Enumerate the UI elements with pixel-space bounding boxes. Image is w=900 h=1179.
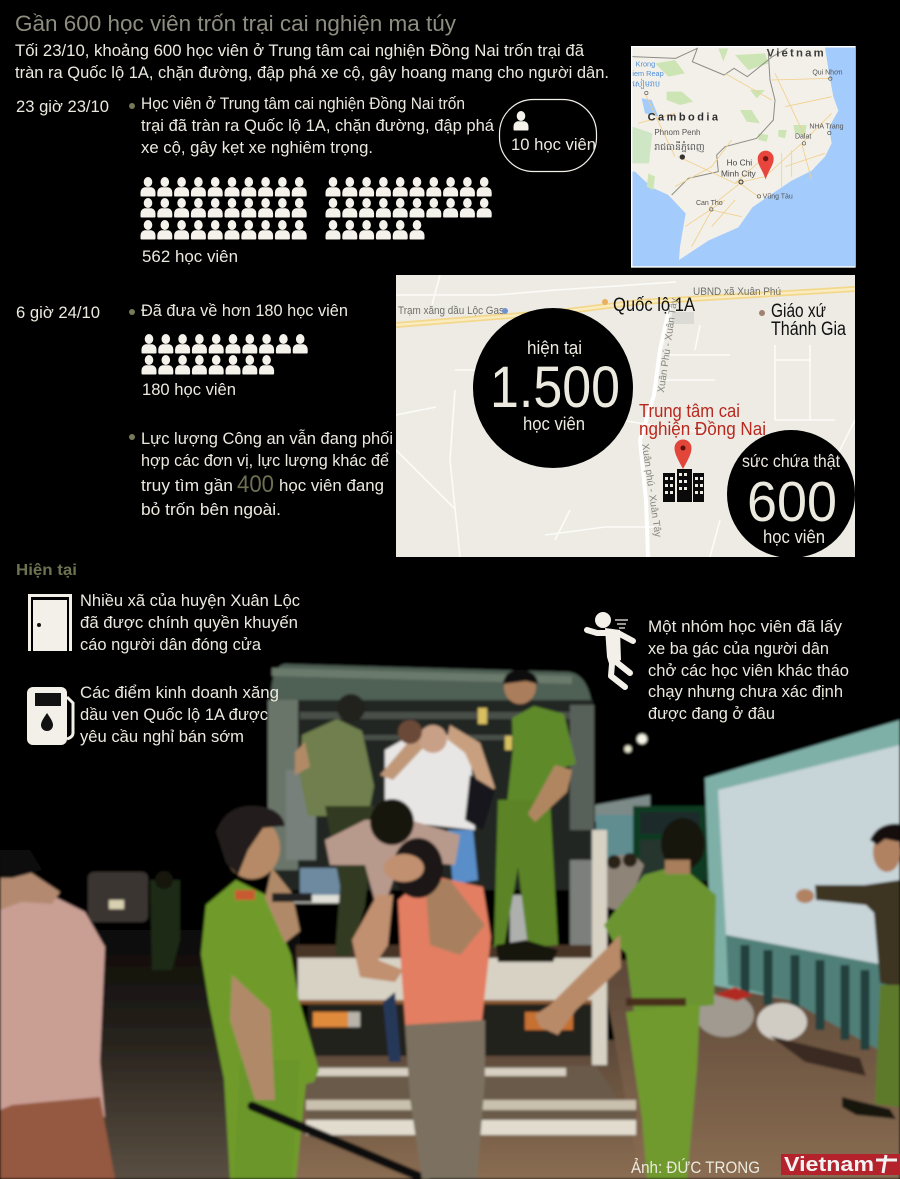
photo: police and recaptured students at the truck [0,662,900,1179]
text: escape by cargo tricycle: chạy nhưng chưa xác định [648,682,843,701]
map: southern Vietnam: Vũng Tàu [763,194,793,201]
truck canopy [268,662,594,702]
event text: search for 400 students [129,429,393,519]
man in checked shirt [0,897,105,1117]
map: southern Vietnam: NHA Trang [809,123,844,130]
map: southern Vietnam: Cambodia [648,112,719,124]
road: Xuân Phú - Xuân Tây [640,300,671,557]
text: door advisory [80,591,300,654]
map: southern Vietnam: Vietnam [767,48,825,60]
text: fuel stations closing: Các điểm kinh doanh xăng [80,683,279,702]
map label: center name: nghiện Đồng Nai [639,419,766,439]
map: southern Vietnam [631,46,856,268]
event text: first event [129,94,495,157]
police officer on truck, standing [507,706,576,804]
police officer with baton [201,880,319,1179]
legend: one icon equals 10 students [500,100,596,172]
icon: running person [587,612,633,687]
text: escape by cargo tricycle: được đang ở đâu [648,704,775,723]
text: escape by cargo tricycle: chở các học viên khác tháo [648,661,849,680]
map: southern Vietnam: រាជធានីភ្នំពេញ [654,141,705,153]
photo credit: Ảnh: ĐỨC TRONG [631,1158,760,1177]
logo: Vietnam+: Vietnam [784,1154,874,1176]
logo: Vietnam+ [781,1154,900,1176]
text: escape by cargo tricycle: xe ba gác của người dân [648,639,829,658]
police officer, back view [604,865,716,1013]
map: center location: UBND xã Xuân Phú [693,286,781,298]
map: center location: Xuân phú - Xuân Tây [639,443,663,538]
intro text: tràn ra Quốc lộ 1A, chặn đường, đập phá xe cộ, gây hoang mang cho người dân. [15,63,609,82]
circle: current 1,500 students: hiện tại [527,338,582,358]
truck bed [296,945,596,959]
people behind [606,855,644,913]
pictogram: 180 students: 180 học viên [142,380,236,399]
map: southern Vietnam: Can Tho [696,200,723,207]
truck cargo box [268,700,593,890]
event text: search for 400 students: Lực lượng Công an vẫn đang phối [141,429,393,448]
map label: Giáo xứ Thánh Gia: Thánh Gia [771,319,846,340]
sacks [696,993,754,1037]
map: center location [396,275,855,557]
text: door advisory: Nhiều xã của huyện Xuân Lộc [80,591,300,610]
map label: Quốc lộ 1A: Quốc lộ 1A [613,295,695,316]
icon: location pin [674,440,692,469]
map label: center name [639,401,766,439]
text: fuel stations closing: yêu cầu nghỉ bán sớm [80,727,244,746]
circle: current 1,500 students [473,308,633,468]
map: southern Vietnam: Krong [636,60,655,69]
wall [702,718,900,1000]
text: door advisory: cáo người dân đóng cửa [80,635,262,654]
intro text [15,41,609,82]
map: southern Vietnam: Dalat [795,134,811,141]
event text: search for 400 students: hợp các đơn vị, lực lượng khác để [141,451,389,470]
map: southern Vietnam: Qui Nhơn [812,69,843,76]
legend: one icon equals 10 students: 10 học viên [511,135,596,154]
event text: first event: Học viên ở Trung tâm cai nghiện Đồng Nai trốn [141,94,465,113]
map: center location: Trạm xăng dầu Lộc Gas [398,305,504,317]
cargo goods [300,868,345,898]
road: Quốc lộ 1A [396,289,855,325]
text: fuel stations closing [80,683,279,746]
event text: search for 400 students: học viên đang [279,476,384,495]
text: escape by cargo tricycle: Một nhóm học viên đã lấy [648,617,842,636]
man with dark hair [323,818,462,900]
map: southern Vietnam: Minh City [721,169,757,179]
section heading: Hiện tại: Hiện tại [16,562,77,579]
police officer on truck, back view [300,719,374,816]
text: fuel stations closing: dầu ven Quốc lộ 1A được [80,705,268,724]
event text: search for 400 students: truy tìm gần [141,476,233,495]
event text: search for 400 students: bỏ trốn bên ngoài. [141,500,281,519]
intro text: Tối 23/10, khoảng 600 học viên ở Trung tâm cai nghiện Đồng Nai trốn trại đã [15,41,585,60]
event text: search for 400 students: 400 [237,471,274,498]
time label: 23 giờ 23/10: 23 giờ 23/10 [16,97,109,116]
map label: center name: Trung tâm cai [639,401,740,421]
map: southern Vietnam: សៀមរាប [632,79,660,90]
circle: real capacity 600 students: học viên [763,526,825,547]
background car [88,872,148,922]
text: escape by cargo tricycle [648,617,849,723]
map label: Giáo xứ Thánh Gia: Giáo xứ [771,301,826,322]
map: southern Vietnam: Phnom Penh [654,128,701,137]
tattooed man in orange shirt [398,875,491,1035]
time label: 6 giờ 24/10: 6 giờ 24/10 [16,303,100,322]
event text: first event: xe cộ, gây kẹt xe nghiêm trọng. [141,138,373,157]
pictogram: 562 students: 562 học viên [142,247,238,266]
map: southern Vietnam: iem Reap [632,69,664,78]
pictogram: 562 students [140,177,492,266]
circle: real capacity 600 students: sức chứa thật [742,451,840,471]
title: Gần 600 học viên trốn trại cai nghiện ma túy [15,11,457,36]
text: door advisory: đã được chính quyền khuyến [80,613,298,632]
event text: first event: trại đã tràn ra Quốc lộ 1A, chặn đường, đập phá [141,116,495,135]
prisoners on truck [385,730,475,830]
baton [252,1106,425,1179]
green gate and building [595,795,650,822]
circle: current 1,500 students: 1.500 [490,355,620,420]
map: southern Vietnam: Ho Chi [727,157,752,167]
icon: door [28,594,72,651]
icon: building [663,469,704,502]
event text: 180 students returned: Đã đưa về hơn 180 học viên [141,301,348,320]
pictogram: 180 students [142,334,308,399]
circle: real capacity 600 students: 600 [747,470,837,534]
circle: current 1,500 students: học viên [523,413,585,434]
circle: real capacity 600 students [727,430,855,558]
man in dark jacket at right [815,880,900,988]
lamps [637,734,647,744]
icon: fuel pump [27,687,73,745]
map label: Giáo xứ Thánh Gia [771,301,846,340]
truck rear steps [306,1066,636,1138]
map: center location: Xuân Phú - Xuân Tây [656,297,680,393]
